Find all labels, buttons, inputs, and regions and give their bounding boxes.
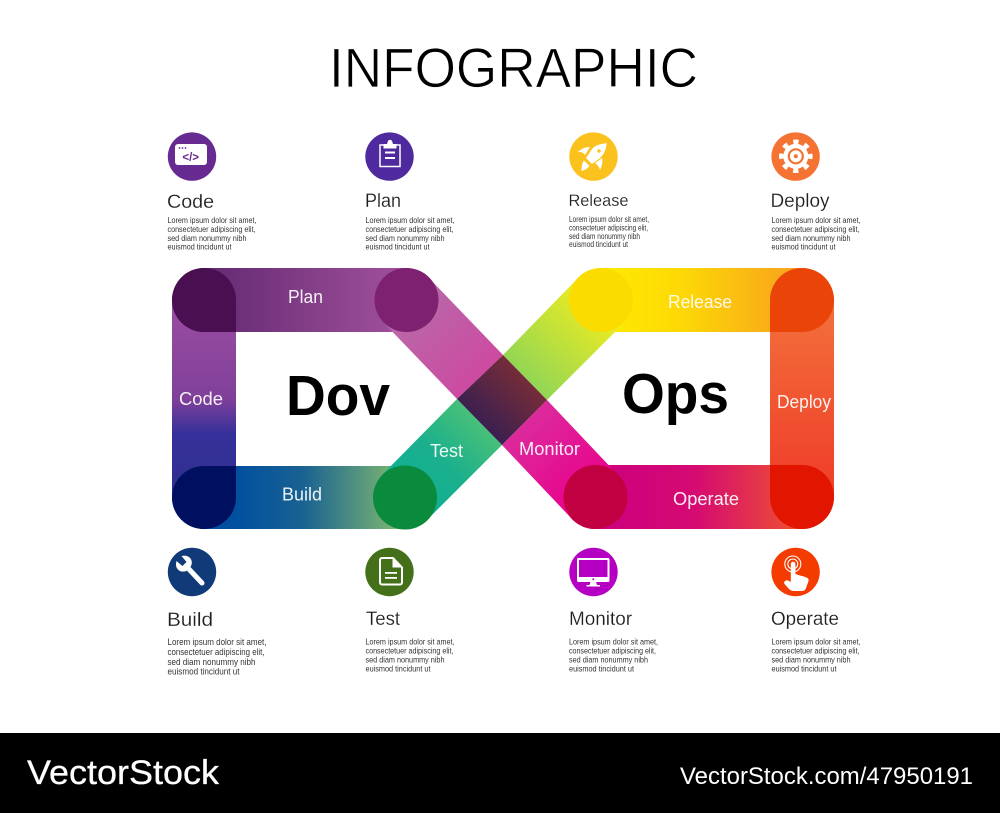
text block: consectetuer adipiscing elit,: [772, 224, 860, 234]
icon: clipboard: [365, 132, 414, 181]
node: Monitor end: [564, 465, 628, 529]
text block: consectetuer adipiscing elit,: [366, 646, 454, 656]
panel: Operate: [771, 548, 860, 674]
node: Release start: [569, 268, 633, 332]
heading: Ops: Ops: [622, 362, 729, 426]
text block: sed diam nonummy nibh: [772, 233, 851, 243]
text block: consectetuer adipiscing elit,: [772, 646, 860, 656]
text block: Lorem ipsum dolor sit amet,: [168, 215, 256, 225]
node: top-right corner: [770, 268, 834, 332]
panel: Build: [167, 548, 266, 678]
panel: Deploy: [770, 132, 860, 252]
text block: euismod tincidunt ut: [168, 242, 232, 252]
heading: Release: Release: [568, 191, 628, 210]
text block: euismod tincidunt ut: [772, 242, 836, 252]
crossing diamond: [457, 355, 547, 445]
text block: euismod tincidunt ut: [569, 664, 635, 674]
panel: Test: [365, 548, 454, 674]
text block: sed diam nonummy nibh: [366, 654, 445, 664]
text block: Lorem ipsum dolor sit amet,: [366, 636, 454, 646]
node: bottom-right corner: [770, 465, 834, 529]
icon: code window: </>: [182, 152, 199, 164]
heading: Dov: Dov: [286, 364, 390, 428]
heading: Deploy: Deploy: [770, 191, 830, 212]
node: top-left corner: [172, 268, 236, 332]
text block: sed diam nonummy nibh: [168, 233, 247, 243]
node: Plan end: [374, 268, 438, 332]
text block: consectetuer adipiscing elit,: [168, 647, 264, 658]
text block: euismod tincidunt ut: [569, 240, 629, 249]
band: diagonal to Release: [503, 277, 624, 400]
heading: Operate: Operate: [771, 609, 839, 630]
band: Plan segment: [172, 268, 438, 332]
panel: Release: [568, 132, 649, 249]
band: Operate segment: [563, 465, 834, 529]
band: diagonal from Plan: [384, 277, 503, 399]
text block: consectetuer adipiscing elit,: [569, 224, 648, 232]
text block: euismod tincidunt ut: [168, 666, 240, 678]
text block: euismod tincidunt ut: [772, 664, 837, 674]
label: Test: Test: [430, 441, 463, 461]
text block: sed diam nonummy nibh: [569, 232, 640, 241]
text block: Lorem ipsum dolor sit amet,: [772, 636, 860, 646]
label: Deploy: Deploy: [777, 392, 831, 412]
heading: Build: Build: [167, 610, 213, 631]
panel: infinity loop diagram: [172, 268, 834, 530]
band: diagonal Test: [383, 399, 502, 520]
heading: Monitor: Monitor: [569, 609, 633, 630]
panel: Plan: [365, 132, 454, 252]
footer bar: [0, 733, 1000, 813]
text block: consectetuer adipiscing elit,: [168, 224, 256, 234]
label: Operate: Operate: [673, 489, 739, 509]
label: Code: Code: [179, 389, 223, 409]
text block: sed diam nonummy nibh: [772, 654, 851, 664]
heading: Test: Test: [366, 609, 401, 630]
band: Deploy segment: [770, 300, 834, 497]
panel: Code: [167, 132, 256, 252]
label: Release: Release: [668, 292, 732, 312]
icon: touch hand: [771, 548, 820, 596]
text block: consectetuer adipiscing elit,: [366, 224, 454, 234]
text block: Lorem ipsum dolor sit amet,: [569, 636, 658, 646]
text block: sed diam nonummy nibh: [569, 654, 648, 664]
text block: Lorem ipsum dolor sit amet,: [168, 637, 266, 648]
panel: Monitor: [569, 548, 658, 674]
text block: consectetuer adipiscing elit,: [569, 646, 656, 656]
icon: rocket: [569, 132, 618, 181]
heading: Code: Code: [167, 192, 214, 213]
text block: Lorem ipsum dolor sit amet,: [772, 215, 860, 225]
text block: sed diam nonummy nibh: [168, 657, 256, 668]
band: Release segment: [569, 268, 834, 332]
icon: wrench: [168, 548, 216, 596]
icon: document: [365, 548, 414, 596]
label: Build: Build: [282, 484, 322, 504]
icon: gear: [771, 132, 820, 181]
text block: Lorem ipsum dolor sit amet,: [366, 215, 454, 225]
label: Plan: Plan: [288, 287, 323, 307]
title: INFOGRAPHIC: [329, 36, 698, 99]
node: bottom-left corner: [172, 466, 236, 529]
label: Monitor: Monitor: [519, 439, 580, 459]
text block: euismod tincidunt ut: [366, 664, 431, 674]
text block: Lorem ipsum dolor sit amet,: [569, 215, 649, 224]
icon: monitor: [569, 548, 618, 596]
node: Build end: [373, 466, 437, 530]
text block: sed diam nonummy nibh: [366, 233, 445, 243]
heading: Plan: Plan: [365, 191, 401, 212]
footer url: VectorStock.com/47950191: [680, 763, 973, 790]
footer brand: VectorStock: [27, 754, 220, 792]
band: Build segment: [172, 466, 437, 529]
text block: euismod tincidunt ut: [366, 242, 430, 252]
band: diagonal Monitor: [502, 400, 617, 520]
band: Code segment: [172, 300, 236, 497]
